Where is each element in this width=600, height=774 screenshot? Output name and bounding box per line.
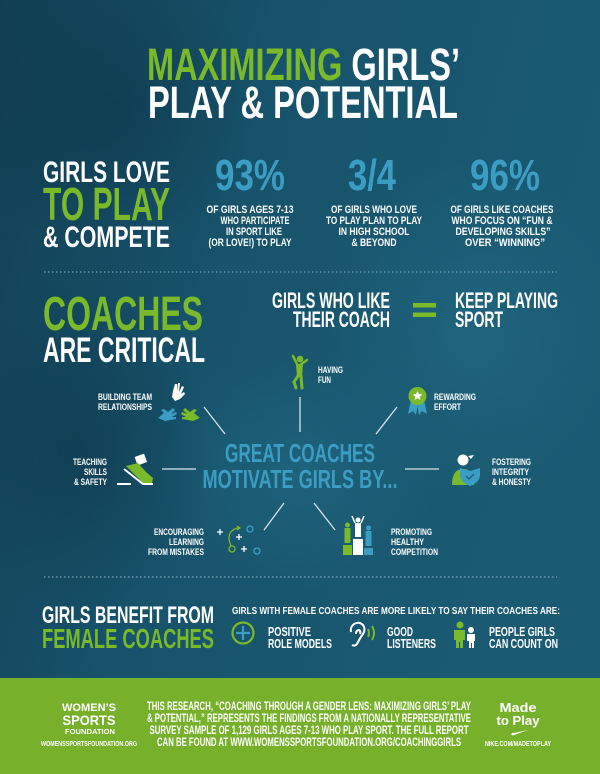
stat: 96%: OF GIRLS LIKE COACHES: [450, 204, 554, 216]
item: teaching skills & safety: & SAFETY: [74, 477, 107, 488]
stat: 3/4: [326, 151, 422, 249]
female coaches benefits: CAN COUNT ON: [489, 636, 558, 651]
item: promoting healthy competition: PROMOTING: [391, 527, 432, 538]
stat: 3/4: OF GIRLS WHO LOVE: [331, 204, 417, 216]
item: building team relationships: [98, 383, 200, 421]
icon: girl with shield: [452, 454, 480, 486]
heading: girls benefit from female coaches: FEMALE COACHES: [42, 623, 214, 654]
title: MAXIMIZING GIRLS’: [147, 39, 460, 90]
item: encouraging learning from mistakes: FROM MISTAKES: [148, 547, 204, 558]
item: promoting healthy competition: [343, 516, 438, 558]
icon: three hands: [158, 383, 200, 421]
stat: 93%: WHO PARTICIPATE: [220, 215, 290, 227]
heading: coaches are critical: ARE CRITICAL: [43, 331, 205, 370]
heading: girls love to play: [43, 156, 170, 254]
item: having fun: HAVING: [318, 365, 343, 376]
female coaches benefits: ROLE MODELS: [268, 636, 332, 651]
item: promoting healthy competition: HEALTHY: [391, 537, 424, 548]
icon: coach with girl: [454, 622, 475, 648]
item: teaching skills & safety: SKILLS: [84, 467, 107, 478]
icon: dancing girl: [293, 356, 307, 388]
female coaches benefits: GOOD: [387, 624, 413, 639]
equation: like coach = keep playing: SPORT: [455, 307, 503, 332]
heading: girls love to play: TO PLAY: [43, 178, 170, 230]
logo: made to play: Made: [500, 700, 536, 715]
item: fostering integrity & honesty: [452, 454, 531, 488]
heading: girls benefit from female coaches: GIRLS BENEFIT FROM: [42, 602, 214, 629]
title: [147, 39, 460, 128]
logo: women's sports foundation: [41, 702, 137, 748]
item: encouraging learning from mistakes: LEARNING: [169, 537, 204, 548]
logo: women's sports foundation: WOMEN’S: [62, 702, 116, 714]
heading: coaches are critical: COACHES: [43, 288, 203, 341]
stat: 96%: WHO FOCUS ON “FUN &: [452, 215, 553, 227]
item: building team relationships: BUILDING TEAM: [98, 392, 152, 403]
item: building team relationships: RELATIONSHIPS: [98, 402, 152, 413]
stat: 3/4: 3/4: [348, 151, 396, 200]
stat: 96%: [450, 151, 554, 249]
icon: plus circle: [232, 622, 254, 644]
title: PLAY & POTENTIAL: [148, 77, 458, 128]
stat: 93%: OF GIRLS AGES 7-13: [206, 204, 294, 216]
stat: 93%: [206, 151, 294, 249]
item: fostering integrity & honesty: FOSTERING: [492, 457, 531, 468]
equation: like coach = keep playing: [272, 288, 558, 332]
logo: made to play: [485, 700, 551, 748]
female coaches benefits: PEOPLE GIRLS: [489, 624, 555, 639]
stat: 96%: 96%: [470, 151, 540, 200]
logo: women's sports foundation: FOUNDATION: [65, 729, 115, 736]
logo: women's sports foundation: WOMENSSPORTSFOUNDATION.ORG: [41, 739, 137, 748]
footer text: research note: [147, 701, 471, 749]
female coaches benefits: LISTENERS: [387, 636, 436, 651]
item: rewarding effort: [408, 387, 476, 415]
equation: like coach = keep playing: THEIR COACH: [293, 307, 390, 332]
center text: great coaches motivate girls by: [202, 438, 398, 494]
logo: made to play: to Play: [496, 713, 540, 728]
item: encouraging learning from mistakes: [148, 526, 260, 558]
icon: sneaker: [117, 454, 153, 485]
heading: coaches are critical: [43, 288, 205, 370]
item: fostering integrity & honesty: INTEGRITY: [492, 467, 529, 478]
equation: like coach = keep playing: GIRLS WHO LIKE: [272, 288, 390, 313]
footer text: research note: CAN BE FOUND AT WWW.WOMENSSPORTSFOUNDATION.ORG/COACHINGGIRLS: [157, 737, 461, 749]
item: rewarding effort: EFFORT: [434, 402, 461, 413]
female coaches benefits: [232, 606, 560, 651]
icon: podium: [343, 516, 373, 555]
logo: women's sports foundation: SPORTS: [62, 712, 116, 728]
item: promoting healthy competition: COMPETITION: [391, 547, 438, 558]
item: teaching skills & safety: [73, 454, 153, 488]
item: fostering integrity & honesty: & HONESTY: [492, 477, 531, 488]
heading: girls love to play: GIRLS LOVE: [43, 156, 170, 189]
female coaches benefits: POSITIVE: [268, 624, 311, 639]
item: having fun: FUN: [318, 375, 331, 386]
heading: girls love to play: & COMPETE: [43, 221, 170, 254]
item: having fun: [293, 356, 343, 388]
stat: 3/4: & BEYOND: [352, 237, 397, 249]
item: encouraging learning from mistakes: ENCOURAGING: [154, 527, 204, 538]
item: teaching skills & safety: TEACHING: [73, 457, 107, 468]
stat: 93%: (OR LOVE!) TO PLAY: [208, 237, 292, 249]
stat: 93%: 93%: [215, 151, 285, 200]
footer: [0, 678, 600, 774]
icon: medal: [408, 387, 427, 415]
stat: 93%: IN SPORT LIKE: [226, 226, 282, 238]
stat: 3/4: TO PLAY PLAN TO PLAY: [326, 215, 422, 227]
center text: great coaches motivate girls by: GREAT COACHES: [225, 438, 375, 468]
heading: girls benefit from female coaches: [42, 602, 214, 654]
stat: 96%: OVER “WINNING”: [465, 237, 545, 249]
connector lines: [162, 397, 439, 530]
item: rewarding effort: REWARDING: [434, 392, 476, 403]
icon: ear: [351, 623, 374, 646]
stat: 3/4: IN HIGH SCHOOL: [338, 226, 410, 238]
icon: play diagram: [217, 526, 260, 554]
stat: 96%: DEVELOPING SKILLS”: [456, 226, 550, 238]
logo: made to play: NIKE.COM/MADETOPLAY: [485, 739, 551, 748]
center text: great coaches motivate girls by: MOTIVATE GIRLS BY...: [202, 464, 398, 494]
